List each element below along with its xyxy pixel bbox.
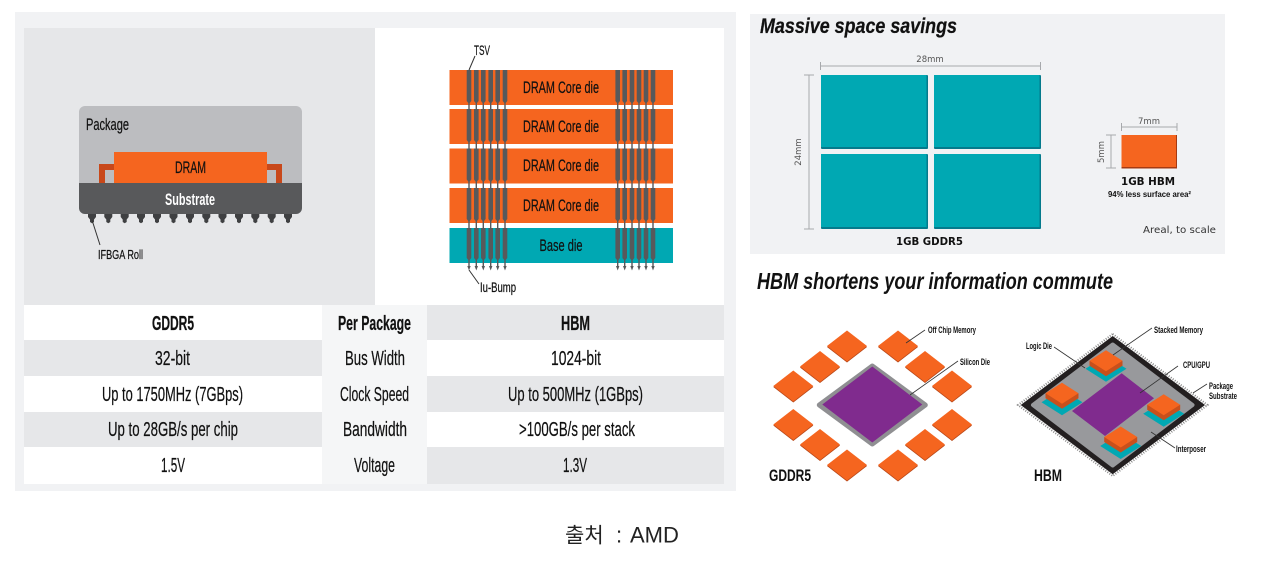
source caption: AMD [630,522,679,548]
HBM chip [1122,135,1177,168]
logic die callout [1026,341,1085,368]
off chip memory callout: Off Chip Memory [928,325,976,335]
28mm dimension: 28mm [916,55,944,65]
Iu-Bump callout: Iu-Bump [480,279,516,295]
package substrate callout: Package [1209,381,1233,391]
voltage row: Voltage [354,455,395,477]
table header row: Per Package [338,313,411,335]
DRAM core die 2: DRAM Core die [523,117,599,136]
package substrate callout [1193,381,1237,401]
7mm dimension: 7mm [1138,117,1160,127]
clock speed row: Up to 500MHz (1GBps) [508,384,643,406]
heading: information commute: HBM shortens your information commute [757,268,1113,294]
off chip memory callout [906,325,976,343]
bus width row [155,348,601,370]
package pins [1018,334,1208,476]
panel: massive space savings [750,14,1225,254]
bandwidth row [108,419,636,441]
TSV callout: TSV [474,42,490,58]
silicon die callout [910,357,990,395]
stacked memory 1 [1086,350,1126,382]
comparison table [24,305,724,484]
clock speed row: Clock Speed [340,384,409,406]
IFBGA callout: IFBGA Roll [98,247,143,262]
stacked memory callout: Stacked Memory [1154,325,1203,335]
DRAM core die 3 [450,148,673,184]
24mm dimension [794,75,814,229]
stacked memory callout [1113,325,1203,355]
heading: Massive space savings [760,15,957,38]
stacked memory 2 [1042,383,1082,415]
GDDR5 label: 1GB GDDR5 [896,236,963,248]
source caption: 출처 [565,524,604,548]
bandwidth row: >100GB/s per stack [519,419,636,441]
DRAM core die 4: DRAM Core die [523,196,599,215]
base die [450,228,673,263]
solder balls [88,214,292,223]
interposer [1033,344,1192,466]
TSV callout [469,42,490,70]
CPU/GPU die [1072,373,1154,436]
panel: HBM stack diagram [375,28,724,305]
GDDR5 diagram label: GDDR5 [769,466,811,485]
table header row: HBM [561,313,590,335]
diagram: HBM layout [1018,325,1237,485]
off-chip memory chips [773,330,972,482]
DRAM core die 4 [450,188,673,223]
table header row: GDDR5 [152,313,194,335]
HBM label: 1GB HBM [1121,176,1175,188]
stacked memory 4 [1100,426,1141,459]
voltage row: 1.3V [563,455,587,477]
DRAM core die 1: DRAM Core die [523,78,599,97]
scale note: Areal, to scale [1143,225,1216,236]
Iu-Bump callout [469,270,516,295]
substrate [79,183,302,214]
package label: Package [86,115,129,134]
silicon die [819,366,925,444]
bus width row: Bus Width [345,348,405,370]
GDDR5 chips [821,75,1041,229]
stacked memory 3 [1143,394,1184,427]
DRAM die: DRAM [175,158,206,177]
bus width row: 1024-bit [551,348,601,370]
silicon die callout: Silicon Die [960,357,990,367]
24mm dimension: 24mm [794,138,804,166]
source caption: : [616,522,622,548]
bandwidth row: Bandwidth [343,419,407,441]
clock speed row [102,384,643,406]
7mm dimension [1122,117,1177,131]
voltage row [161,455,587,477]
surface area note: 94% less surface area² [1108,190,1191,199]
CPU/GPU callout: CPU/GPU [1183,360,1210,370]
HBM diagram label: HBM [1034,466,1062,485]
DRAM core die 2 [450,109,673,144]
panel: package and stack comparison [15,12,736,491]
table header row [152,313,590,335]
5mm dimension [1097,135,1116,168]
clock speed row: Up to 1750MHz (7GBps) [102,384,243,406]
DRAM core die 3: DRAM Core die [523,156,599,175]
package body [79,106,302,183]
left TSV columns [467,70,507,270]
wire bonds [102,167,279,183]
logic die callout: Logic Die [1026,341,1052,351]
DRAM core die 1 [450,70,673,105]
base die: Base die [540,236,582,255]
bandwidth row: Up to 28GB/s per chip [108,419,238,441]
28mm dimension [820,55,1040,70]
substrate: Substrate [165,190,215,209]
bus width row: 32-bit [155,348,190,370]
interposer callout [1151,432,1206,454]
right TSV columns [615,70,655,270]
interposer callout: Interposer [1176,444,1206,454]
diagram: GDDR5 layout [769,325,990,485]
CPU/GPU callout [1140,360,1210,393]
5mm dimension: 5mm [1097,141,1107,163]
panel: GDDR5 package diagram [24,28,375,305]
DRAM die [114,152,267,183]
IFBGA callout [92,220,143,262]
voltage row: 1.5V [161,455,185,477]
package substrate [1021,336,1205,474]
package substrate callout: Substrate [1209,391,1237,401]
